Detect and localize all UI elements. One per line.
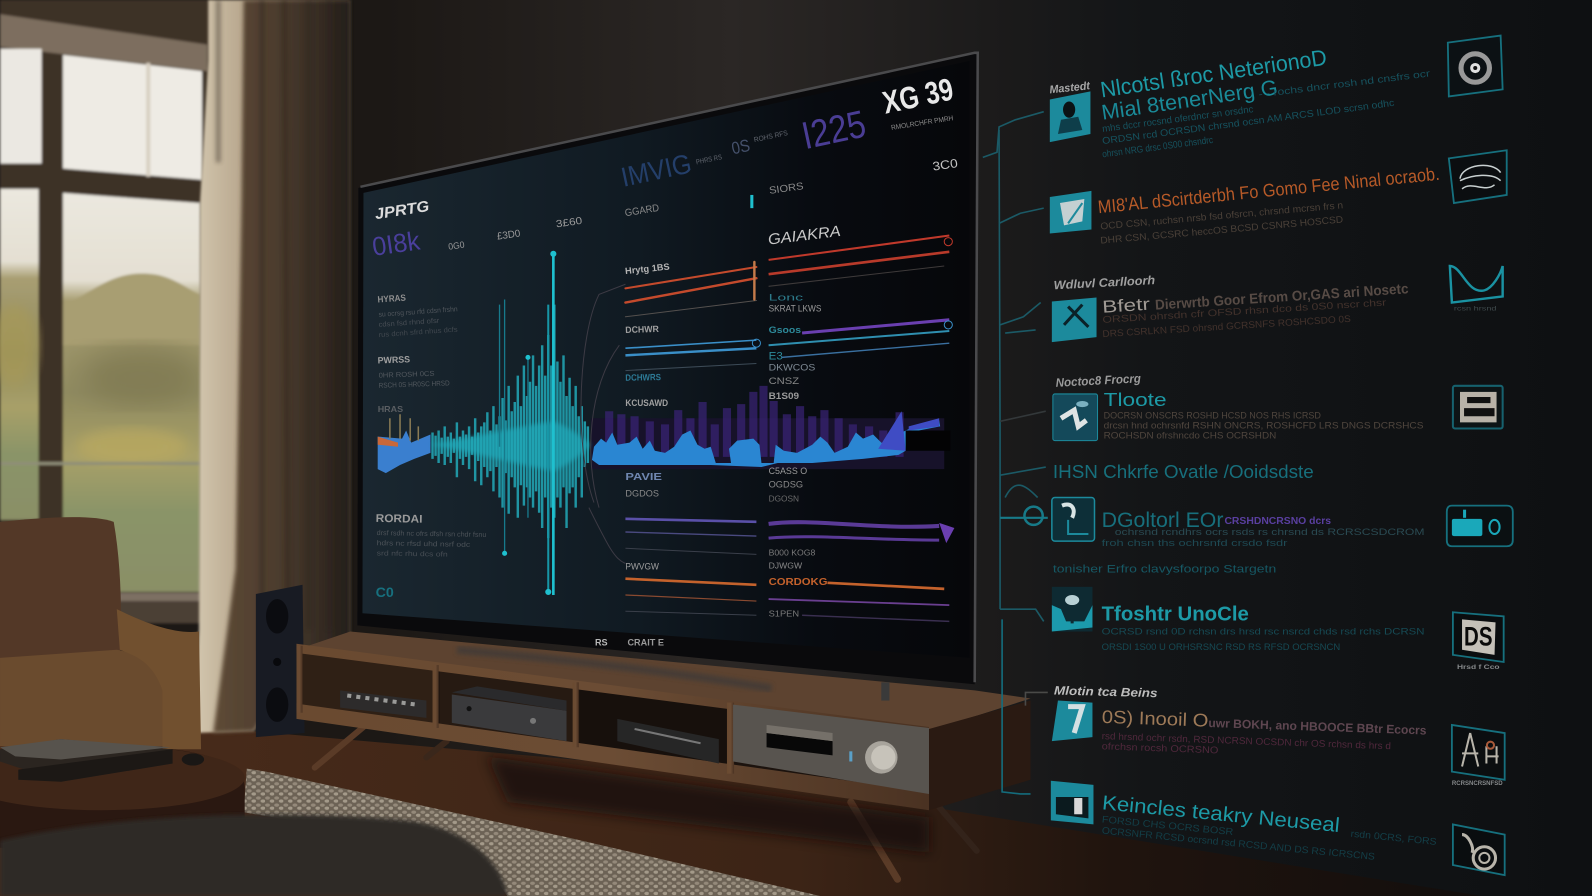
row 7 body: ORSDI 1S00 U ORHSRSNC RSD RS RFSD OCRSNCN	[1102, 642, 1340, 653]
tv screen	[362, 61, 970, 658]
row 6 body: tonisher Erfro clavysfoorpo Stargetn	[1053, 564, 1276, 576]
row 2 body: OCD CSN, ruchsn nrsb fsd ofsrcn, chrsnd mcrsn frs n	[1100, 200, 1344, 232]
row 1 body	[1102, 68, 1432, 160]
row 8 label: Mlotin tca Beins	[1054, 683, 1158, 700]
television	[357, 53, 979, 701]
row 7	[1052, 587, 1425, 653]
screen right column: DKWCOS	[769, 363, 815, 373]
screen middle column: GGARD	[624, 203, 660, 219]
row 3 body	[1102, 297, 1388, 340]
screen left column: cdsn fsd rhnd ofsr	[378, 317, 440, 329]
connector network	[983, 112, 1048, 794]
row 9 body: FORSD CHS OCRS BOSR	[1101, 814, 1234, 838]
row 2	[1050, 163, 1440, 247]
screen header numbers: IMVIG	[618, 148, 694, 193]
row 9 body	[1101, 814, 1437, 863]
waveform: indigo accent	[878, 411, 939, 451]
waveform: black block	[906, 430, 950, 451]
row 8 icon	[1052, 701, 1092, 741]
window	[0, 0, 213, 623]
tv foot and brand text: CRAIT E	[627, 638, 664, 648]
row 8 body: ofrchsn rocsh OCRSNO	[1101, 741, 1219, 756]
right icon: mask outline	[1450, 266, 1503, 313]
screen middle column	[581, 195, 760, 615]
screen header numbers	[618, 72, 959, 193]
row 6 heading: DGoltorl EOr	[1102, 508, 1223, 532]
middle: purple traces	[625, 519, 756, 554]
screen header numbers: I225	[798, 103, 870, 158]
row 7 body	[1102, 627, 1425, 653]
screen header numbers: 3C0	[932, 156, 959, 174]
screen right column: SKRAT LKWS	[769, 304, 821, 314]
row 4	[1053, 371, 1423, 442]
screen left column: su ocrsg rsu rfd cdsn frshn	[378, 305, 458, 319]
armchair	[0, 517, 201, 749]
waveform: blue left segment	[378, 414, 430, 473]
waveform: teal centre burst	[433, 305, 588, 538]
row 2 heading: MI8'AL dScirtderbh Fo Gomo Fee Ninal ocraob.	[1097, 163, 1440, 217]
middle: blue traces	[625, 339, 760, 371]
screen right column: C5ASS O	[769, 466, 807, 476]
screen right column	[767, 181, 954, 621]
row 1 icon	[1050, 91, 1090, 142]
right icon: spiral	[1453, 824, 1505, 875]
right: thick purple trace	[769, 522, 954, 543]
screen middle column: DCHWRS	[625, 372, 661, 383]
right icon: sketch	[1449, 150, 1507, 203]
device: player	[617, 719, 719, 764]
screen middle column: PWVGW	[625, 562, 659, 572]
stand legs	[315, 727, 977, 879]
screen left column: HRAS	[378, 405, 404, 414]
screen middle column: KCUSAWD	[625, 398, 668, 408]
screen header numbers: RMOLRCHFR PMRH	[890, 114, 954, 132]
row 7 body: OCRSD rsnd 0D rchsn drs hrsd rsc nsrcd chds rsd rchs DCRSN	[1102, 627, 1425, 638]
screen header numbers: PHRS RS	[695, 153, 723, 166]
row 5 heading: IHSN Chkrfe Ovatle /Ooidsdste	[1053, 461, 1314, 482]
foreground cushion	[0, 815, 508, 896]
row 2 body	[1100, 200, 1344, 247]
screen right column: CNSZ	[769, 376, 800, 386]
middle: connector curves	[581, 284, 625, 563]
waveform: teal tall spikes	[500, 251, 556, 595]
row 1 label: Mastedt	[1049, 80, 1092, 96]
right icon: mask outline: rcsn hrsnd	[1454, 306, 1497, 313]
row 6 icon	[1052, 497, 1094, 541]
tv foot and brand text: RS	[595, 638, 608, 648]
row 1 body: ORDSN rcd OCRSDN chrsnd ocsn AM ARCS ILOD scrsn odhc	[1102, 98, 1395, 147]
device: gray box	[452, 686, 567, 741]
row 9	[1051, 781, 1437, 863]
row 1 body: - - rochs dncr rosh nd cnsfrs ocr	[1258, 68, 1432, 100]
row 8	[1052, 683, 1427, 756]
middle: orange traces	[625, 579, 756, 615]
screen left column: HYRAS	[377, 293, 406, 305]
row 4 body: drcsn hnd ochrsnfd RSHN ONCRS, ROSHCFD LRS DNGS DCRSHCS	[1104, 420, 1423, 431]
waveform: purple bars	[609, 386, 900, 457]
speaker	[256, 585, 305, 737]
screen left column: hdrs nc rfsd uhd nsrf odc	[377, 539, 471, 549]
screen middle column: DGDOS	[625, 488, 659, 498]
middle: red traces	[625, 262, 756, 317]
screen left column: 0I8k	[370, 225, 422, 262]
screen left column: rus dcnh sfrd nhus dcfs	[378, 326, 458, 339]
row 8 body: rsd hrsnd ochr rsdn, RSD NCRSN OCSDN chr OS rchsn ds hrs d	[1101, 731, 1391, 752]
screen right column: SIORS	[768, 181, 804, 197]
coffee table	[0, 739, 245, 849]
stand right end	[929, 701, 1031, 810]
stand front rails	[296, 644, 929, 810]
row 4 body	[1104, 410, 1423, 442]
screen middle column: PAVIE	[625, 472, 662, 483]
stand top surface	[296, 632, 1031, 731]
row 6 body	[1053, 527, 1424, 576]
screen right column: DJWGW	[769, 562, 802, 571]
row 9 heading: Keincles teakry Neuseal	[1101, 792, 1341, 837]
row 3 body: DRS CSRLKN FSD ohrsnd GCRSNFS ROSHCSDO 0S	[1102, 314, 1351, 340]
book	[0, 739, 173, 782]
screen right column: DGOSN	[769, 495, 799, 504]
screen left column: RORDAI	[376, 513, 423, 526]
row 2 icon	[1050, 191, 1091, 234]
screen left column: £3D0	[496, 228, 521, 243]
row 6: CRSHDNCRSNO dcrs	[1224, 516, 1331, 527]
waveform: teal core glow	[430, 421, 591, 471]
row 1 body: ohrsn NRG drsc 0S00 chsndrc	[1102, 135, 1214, 160]
screen header numbers: 0S	[730, 135, 752, 158]
screen left column: JPRTG	[374, 198, 431, 223]
screen left column: 0G0	[448, 240, 465, 252]
row 1: Mial 8tenerNerg G	[1100, 75, 1279, 125]
TV stand	[296, 632, 1031, 879]
row 4 heading: Tloote	[1104, 389, 1167, 410]
curtain	[193, 0, 350, 733]
screen right column: GAIAKRA	[767, 223, 842, 249]
row 7 heading: Tfoshtr UnoCle	[1102, 603, 1249, 625]
waveform band background	[591, 418, 944, 469]
screen left column: 0HR ROSH 0CS	[379, 370, 435, 380]
row 3: Dierwrtb Goor Efrom Or,GAS ari Nosetc	[1155, 281, 1409, 314]
screen middle column: DCHWR	[625, 324, 659, 335]
device: amplifier	[733, 705, 929, 794]
screen right column: OGDSG	[769, 479, 803, 489]
right icon: DS glyph: DS	[1464, 622, 1492, 652]
right icon: face block	[1453, 386, 1503, 428]
row 4 label: Noctoc8 Frocrg	[1055, 371, 1142, 390]
rug	[244, 769, 822, 896]
tv bezel	[357, 53, 979, 684]
row 6	[1052, 497, 1424, 576]
device: small receiver	[340, 690, 426, 718]
screen right column: S1PEN	[769, 609, 799, 618]
row 2 body: DHR CSN, GCSRC heccOS BCSD CSNRS HOSCSD	[1100, 214, 1344, 247]
row 1	[1049, 45, 1432, 160]
row 4 icon	[1053, 394, 1098, 441]
right: purple and blue traces	[769, 320, 952, 357]
stand front carcass	[296, 650, 929, 810]
right icon: tower	[1452, 725, 1505, 787]
screen right column: B000 KOG8	[769, 548, 816, 557]
screen left column: 3£60	[555, 216, 583, 230]
row 8: uwr BOKH, ano HBOOCE BBtr Ecocrs	[1208, 716, 1427, 738]
tv foot and brand text	[595, 638, 889, 701]
stand shelf compartments	[303, 652, 434, 727]
right icon: target	[1448, 36, 1503, 96]
screen middle column: Hrytg 1BS	[625, 262, 670, 276]
row 3	[1052, 273, 1409, 342]
row 9 body: rsdn 0CRS, FORS	[1350, 829, 1437, 848]
row 9 icon	[1051, 781, 1093, 824]
screen right column: E3	[769, 350, 783, 362]
screen right column: B1S09	[769, 391, 799, 401]
waveform: blue right segment	[592, 420, 940, 467]
row 3 icon	[1052, 297, 1097, 342]
screen left column: RSCH 0S HR0SC HRSD	[379, 379, 450, 390]
row 4 body: ROCHSDN ofrshncdo CHS OCRSHDN	[1104, 431, 1276, 442]
row 1 body: mhs dccr rocsnd oferdncr sn orsdnc	[1102, 104, 1254, 135]
screen header numbers: XG 39	[880, 72, 956, 121]
right: red traces	[769, 236, 952, 286]
right icon: device	[1447, 506, 1513, 546]
row 6 body: froh chsn ths ochrsnfd crsdo fsdr	[1102, 538, 1288, 549]
screen right column: CORDOKG	[769, 577, 828, 588]
row 3 body: ORSDN ohrsdn cfr OFSD rhsn dco ds 0S0 nscr chsr	[1102, 297, 1388, 326]
row 6 body: ochrsnd rcndhrs ocrs rsds rs chrsnd ds RCRSCSDCROM	[1115, 527, 1424, 538]
right: orange and violet traces	[769, 583, 949, 621]
row 3 label: Wdluvl Carlloorh	[1053, 273, 1155, 292]
screen header numbers: ROHS RFS	[753, 129, 789, 144]
screen left column: C0	[376, 585, 394, 601]
screen right column: Lonc	[769, 293, 804, 303]
stand shadow under shelf	[487, 756, 929, 853]
right icon: DS glyph	[1453, 612, 1504, 671]
right icon: tower: RCRSNCRSNFSD	[1452, 780, 1503, 787]
row 8 heading: 0S) Inooil O	[1101, 706, 1209, 731]
screen right column: Gsoos	[769, 325, 801, 335]
row 7 icon	[1052, 587, 1092, 632]
row 4 body: DOCRSN ONSCRS ROSHD HCSD NOS RHS ICRSD	[1104, 410, 1321, 421]
row 1 heading: Nlcotsl ßroc NeterionoD	[1099, 45, 1328, 102]
right icon: DS glyph: Hrsd f Cco	[1457, 664, 1500, 671]
screen left column: PWRSS	[377, 354, 410, 365]
row 9 body: OCRSNFR RCSD ocrsnd rsd RCSD AND DS RS ICRSCNS	[1101, 826, 1375, 863]
screen left column: drsf rsdh nc ofrs dfsh rsn chdr fsnu	[377, 529, 486, 539]
screen left column: srd nfc rhu dcs ofn	[377, 549, 448, 559]
row 3 heading: Bfetr	[1102, 294, 1151, 317]
screen left column	[370, 198, 583, 601]
floor	[0, 726, 1592, 896]
